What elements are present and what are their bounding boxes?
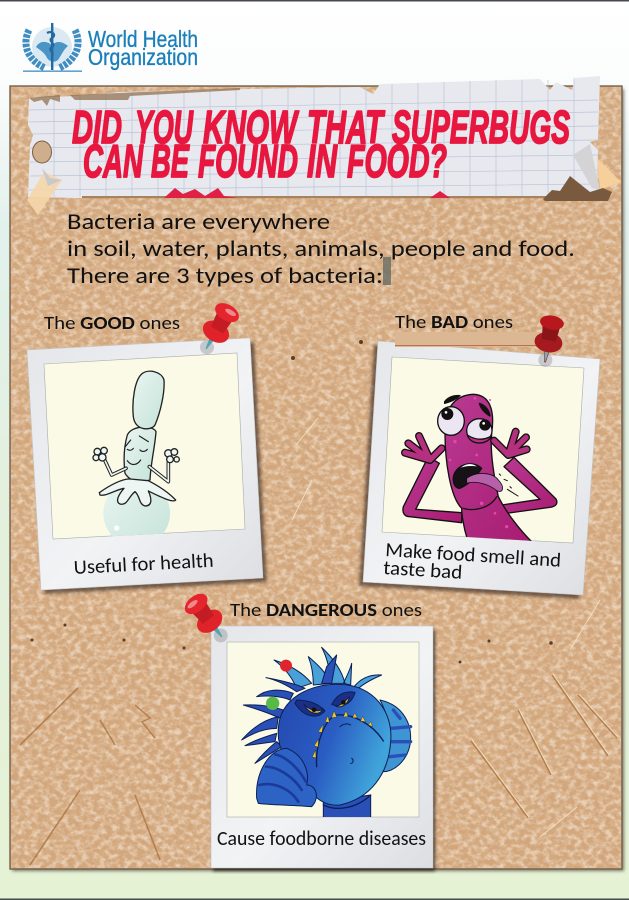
left tape <box>27 172 62 215</box>
panel: good bacteria <box>27 299 267 594</box>
heading: dangerous: The DANGEROUS ones <box>230 599 422 621</box>
polaroid: dangerous <box>211 626 435 871</box>
icon: red pushpin <box>191 299 243 360</box>
heading: good: The GOOD ones <box>44 312 180 334</box>
title: IN <box>307 135 338 187</box>
torn paper title banner <box>27 76 621 215</box>
intro text: Bacteria are everywhere <box>67 208 330 236</box>
pin hole <box>32 141 52 163</box>
spikes <box>242 647 382 763</box>
logo wordmark: World Health <box>88 26 198 52</box>
panel: dangerous bacteria <box>180 589 435 871</box>
left hand <box>405 436 442 460</box>
caption: bad: Make food smell and <box>385 538 562 573</box>
intro text <box>67 208 575 290</box>
title: FOOD? <box>347 135 447 187</box>
title: THAT <box>307 101 385 153</box>
right tape <box>573 144 621 190</box>
torn red letters <box>164 188 450 198</box>
caption: bad: taste bad <box>383 556 463 585</box>
title: KNOW <box>203 101 299 153</box>
illustration: disgusted bad bacterium <box>403 394 557 542</box>
paper sheet <box>28 76 600 198</box>
title <box>72 101 570 187</box>
logo wordmark <box>88 26 198 70</box>
logo wordmark: Organization <box>88 44 198 70</box>
icon: dark red pushpin <box>530 313 567 369</box>
illustration: angry dangerous bacterium <box>242 647 411 818</box>
title: YOU <box>135 101 194 153</box>
title: FOUND <box>198 135 298 187</box>
right hand <box>494 432 527 455</box>
caption: good: Useful for health <box>73 549 214 580</box>
caption: bad <box>383 538 562 585</box>
title: CAN <box>83 135 143 187</box>
torn corner <box>543 176 612 201</box>
intro text: There are 3 types of bacteria: <box>67 262 383 290</box>
WHO logo <box>23 23 198 72</box>
title: DID <box>72 101 122 153</box>
title: BE <box>151 135 190 187</box>
icon: red pushpin left <box>180 589 236 650</box>
polaroid: bad <box>359 332 600 599</box>
panel: bad bacteria <box>359 311 600 599</box>
heading: bad: The BAD ones <box>395 311 513 333</box>
polaroid: good <box>27 338 267 594</box>
intro text: in soil, water, plants, animals, people and food. <box>67 235 575 263</box>
illustration: meditating good bacterium <box>93 371 179 547</box>
icon: WHO emblem <box>23 23 82 72</box>
caption: dangerous: Cause foodborne diseases <box>217 827 426 851</box>
